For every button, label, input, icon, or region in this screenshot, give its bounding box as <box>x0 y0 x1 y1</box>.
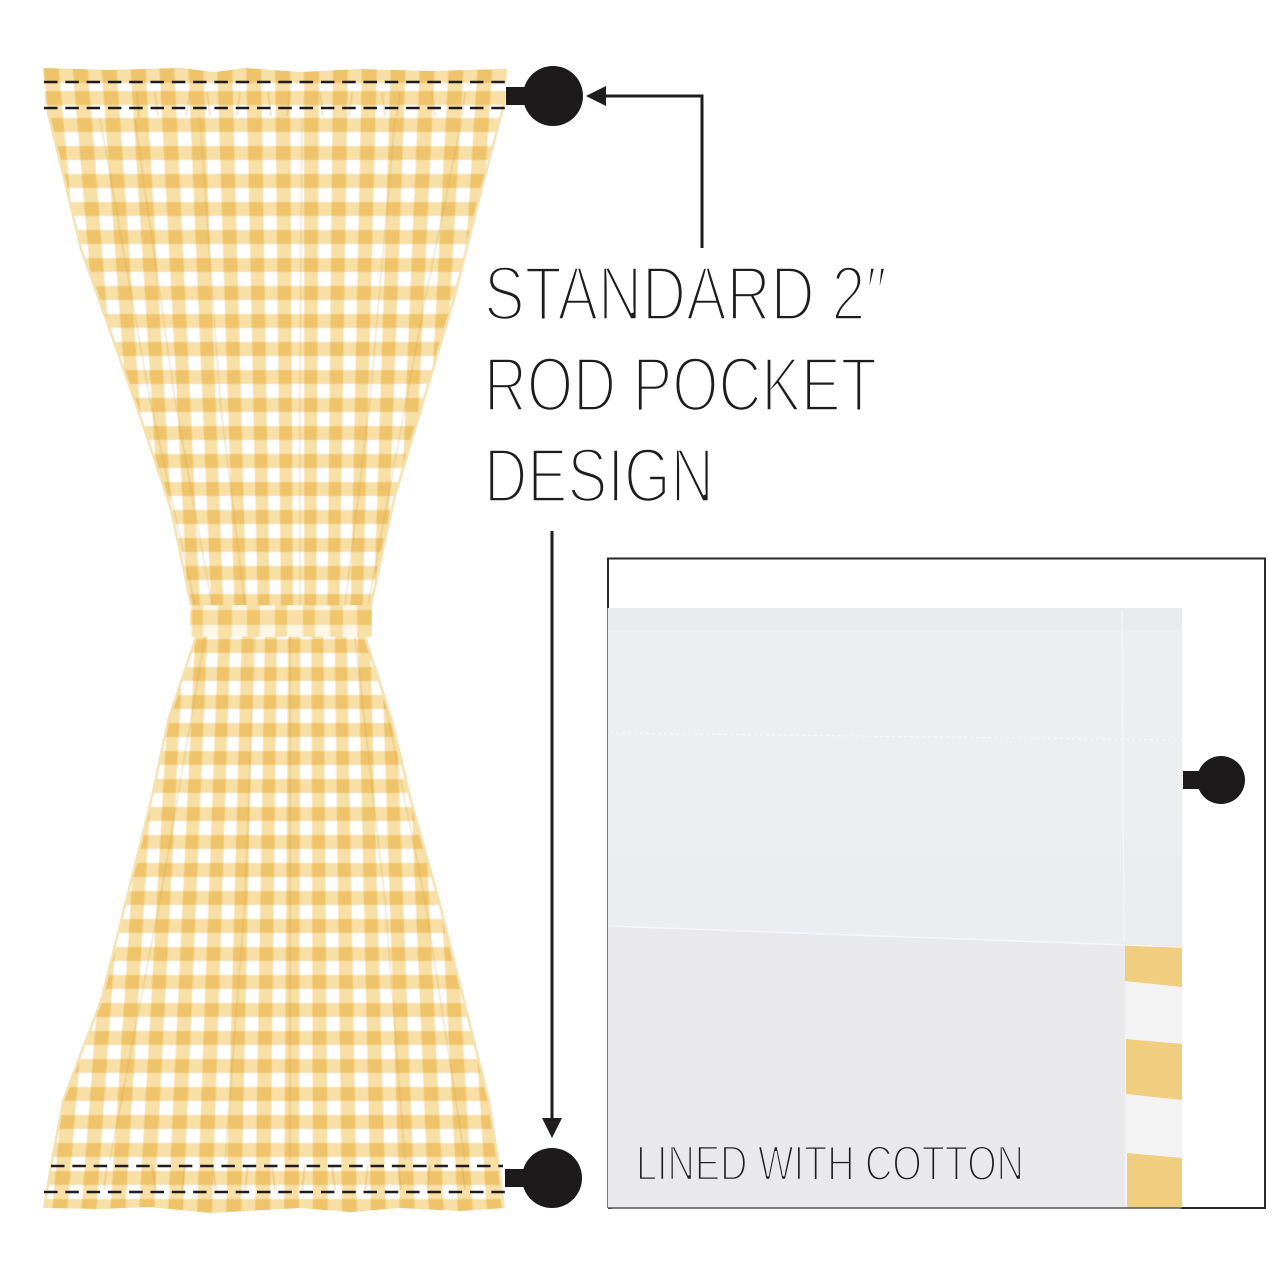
stitch lines: bottom rod pocket <box>44 1166 505 1192</box>
lower lining fabric <box>608 925 1125 1208</box>
upper curtain panel <box>40 60 510 610</box>
heading: standard 2 inch rod pocket design: DESIGN <box>484 433 714 519</box>
panel: lining detail inset <box>608 558 1265 1208</box>
inset border <box>608 558 1265 1208</box>
icon: inset curtain rod end <box>1183 756 1245 804</box>
label: lined with cotton: LINED WITH COTTON <box>636 1137 1024 1191</box>
arrow: label to top rod <box>586 86 702 248</box>
upper white flap <box>608 608 1182 946</box>
lining left edge <box>606 608 608 1208</box>
flap seams <box>608 610 1182 947</box>
heading: standard 2 inch rod pocket design <box>484 251 887 519</box>
stitch lines: top rod pocket <box>44 82 506 108</box>
yellow striped side hem <box>1125 940 1182 1208</box>
heading: standard 2 inch rod pocket design: ROD POCKET <box>484 342 877 428</box>
top hem shadow band <box>608 608 1182 630</box>
heading: standard 2 inch rod pocket design: STANDARD 2″ <box>484 251 887 337</box>
icon: top curtain rod end <box>506 66 583 126</box>
lower curtain panel <box>40 630 510 1220</box>
icon: bottom curtain rod end <box>505 1148 582 1208</box>
lining bottom edge <box>608 1207 1182 1209</box>
curtain illustration <box>40 60 510 1220</box>
tie-back band <box>190 605 372 637</box>
arrow: label to bottom rod <box>542 531 562 1138</box>
